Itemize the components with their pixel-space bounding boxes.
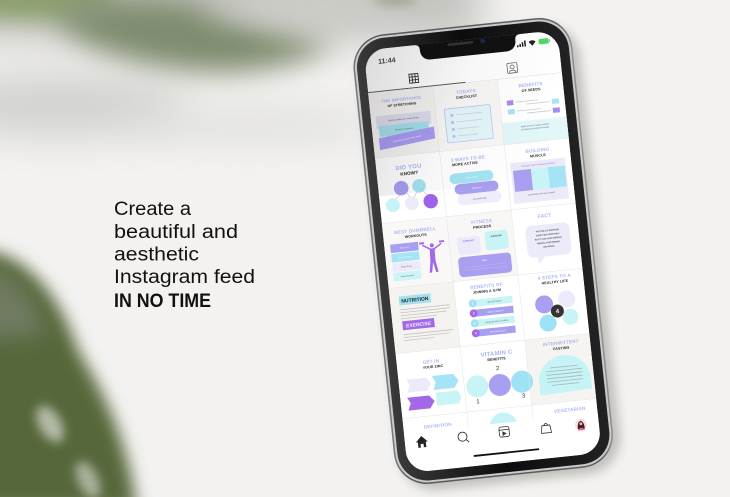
cell: intermittent fasting: INTERMITTENT [543,339,579,347]
cell: building muscle: THE BEST WAY TO BUILD MUSCLE [521,161,556,168]
cell: the importance of stretching [374,94,436,150]
cell: building muscle: BUILDING [525,147,550,154]
phone [350,14,624,494]
cell: todays checklist: TODAYS [456,88,476,95]
tab icon: tagged [507,62,518,73]
phone shadow [356,21,624,494]
cell: benefits of joining a gym: BENEFITS OF [470,282,503,290]
cell: benefits of seeds: OF SEEDS [522,87,541,93]
cell: the importance of stretching: THE IMPORTANCE [381,95,422,104]
cell: building muscle: Consistency is the key to growth [528,191,555,196]
screen shading [366,45,474,196]
icon: home [416,436,428,448]
headline text: Instagram feed [114,267,255,288]
cell: 3 ways to be more active [450,155,502,206]
cell: benefits of seeds [498,79,569,145]
home indicator [473,448,539,457]
headline text [114,199,255,312]
speech bubble [525,222,573,265]
cell: building muscle [509,145,569,204]
cell: get in your zinc: GET IN [423,358,440,365]
cell: intermittent fasting: FASTING [553,346,570,351]
cell: todays checklist: CHECKLIST [456,94,478,100]
icon: shop [541,423,552,433]
cell: best dumbbell workouts: WORKOUTS [405,233,427,239]
cell: fact: GOOD FOR YOUR BODY, [536,233,560,237]
cell: benefits of joining a gym: JOINING A GYM [473,288,501,295]
cell: fact [526,213,572,264]
cell: benefits of joining a gym: BETTER MOOD [488,300,502,304]
headline text: beautiful and [114,222,238,243]
cell: best dumbbell workouts: Shoulder Press [399,255,412,259]
speaker [447,41,473,46]
cell: fact: AND MOOD. [543,244,556,249]
grid lines [368,73,598,434]
cell: intermittent fasting [535,338,592,396]
cell: circle fragment [490,412,517,424]
cell: fitness process: WORKOUT [463,240,475,243]
cell: nutrition and exercise: EXERCISE [406,321,432,329]
cell: definition: DEFINITION [424,422,452,430]
cell: 3 ways to be more active: MORE ACTIVE [452,161,479,167]
camera [480,38,485,43]
cell: fact: NOT ONLY IS EXERCISE [536,229,560,233]
cell: best dumbbell workouts: Bench Press [401,265,412,269]
cell: did you know: DID YOU [395,163,422,172]
cell: fact: FACT [537,213,552,220]
cell backgrounds [368,73,596,419]
headline text: aesthetic [114,244,199,266]
cell: 3 ways to be more active: 3 WAYS TO BE [451,154,485,163]
cell: 3 ways to be more active: Go outside daily [473,196,487,201]
cell: the importance of stretching: Stretch every day for better results [393,134,422,143]
cell: vitamin c benefits: VITAMIN C [480,349,513,359]
cell: best dumbbell workouts: Bicep Curl [400,246,409,250]
cell: fitness process [454,216,513,278]
blurred leaf shadow: bottom left [0,250,137,497]
status bar: icons [516,38,550,47]
cell: best dumbbell workouts: Tricep Extension [400,274,415,278]
screen [363,28,602,475]
cell: 3 ways to be more active: Walk more [472,186,481,190]
cell: fitness process: REST [482,260,488,262]
tab underline [368,82,466,93]
notch [412,34,522,60]
blurred leaf shadow: top [0,0,480,141]
cell: benefits of joining a gym: EXERCISE WITH OTHERS [485,320,509,324]
cell: benefits of seeds: BENEFITS [518,81,543,88]
icon: reels [499,426,510,437]
cell: 4 steps to a healthy life: HEALTHY LIFE [541,279,569,286]
cell: 4 steps to a healthy life: 4 STEPS TO A [537,272,572,281]
cell: benefits of joining a gym: MORE STRENGTH [487,310,505,314]
cell: todays checklist [442,87,493,143]
cell: fact: MENTAL FUNCTIONING [537,240,561,245]
cell: benefits of joining a gym: STAY MOTIVATED [490,329,506,334]
cell: vegetarian: VEGETARIAN [554,406,586,414]
cell: best dumbbell workouts: BEST DUMBBELL [394,226,436,235]
cell: benefits of joining a gym: 1 [472,301,474,305]
cell: get in your zinc [406,359,462,411]
cell: fact: BUT IT CAN ALSO IMPROVE [535,236,563,242]
cell: nutrition and exercise [399,291,454,341]
icon: profile avatar [575,419,587,431]
cell: benefits of joining a gym: 2 [473,311,475,315]
headline text: Create a [114,199,191,220]
phone frame [350,15,616,487]
cell: best dumbbell workouts [390,226,444,282]
cell: benefits of joining a gym: 4 [475,331,477,335]
cell: benefits of seeds: Seeds are rich in healthy nutrients [520,122,549,128]
cell: benefits of joining a gym [467,281,516,338]
cell: benefits of seeds: and keep your body full of energy [521,125,549,131]
cell: benefits of joining a gym: 3 [474,321,476,325]
cell: get in your zinc: YOUR ZINC [423,364,444,370]
icon: figure lifting dumbbells [419,241,447,273]
cell: vitamin c benefits [466,350,534,404]
status bar: time: 11:44 [378,57,396,66]
headline text: IN NO TIME [114,291,211,312]
cell: the importance of stretching: Stretching keeps the muscles flexible [388,116,419,122]
cell: vitamin c benefits: BENEFITS [487,356,507,362]
icon: search [458,432,469,443]
cell: 4 steps to a healthy life [535,274,578,332]
cell: the importance of stretching: Flexibility is important [395,127,414,132]
cell: nutrition and exercise: NUTRITION [401,296,429,305]
cell: did you know: KNOW? [400,170,418,177]
cell: did you know [386,163,438,212]
cell: fitness process: FITNESS [471,218,492,225]
cell: 4 steps to a healthy life: 4 [556,309,560,315]
cell: fitness process: PROCESS [473,224,492,230]
cell: vitamin c benefits: 2 [496,366,500,372]
cell: building muscle: MUSCLE [530,153,547,159]
cell: vitamin c benefits: 1 [476,399,481,406]
cell: vitamin c benefits: 3 [522,393,526,400]
tab icon: grid [409,73,419,83]
nav bar [404,413,602,475]
cell: the importance of stretching: OF STRETCHING [387,101,417,108]
cell: 3 ways to be more active: Take the stairs [465,175,478,179]
cell: fitness process: EXERCISE [491,235,502,238]
